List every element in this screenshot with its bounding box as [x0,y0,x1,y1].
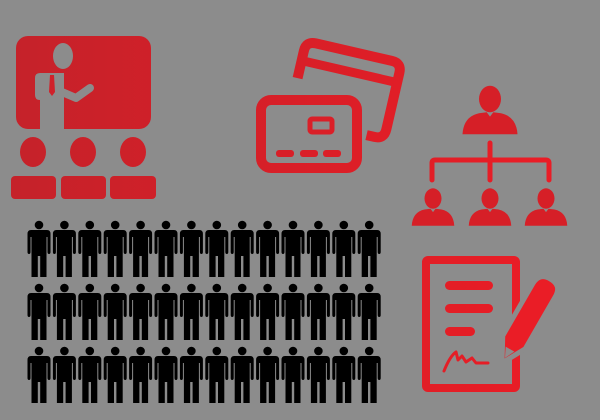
icon: credit cards [261,41,402,168]
people grid [28,221,381,403]
icon: org chart [412,86,567,226]
icon: presentation [11,36,156,199]
icon: signed document [426,260,562,388]
